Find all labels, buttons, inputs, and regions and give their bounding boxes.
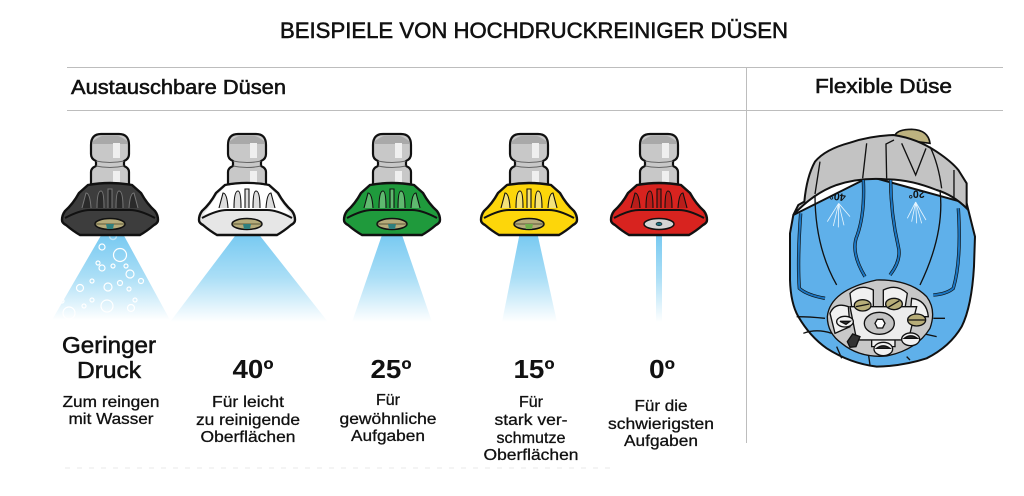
face (827, 280, 933, 356)
spray: 0 degrees (656, 232, 662, 322)
text: 40 degree use: Oberflächen (200, 429, 296, 446)
text: 15 degree use: schmutze (496, 430, 566, 447)
label: 40 degrees: 40º (232, 354, 274, 384)
text: 0 degree use: schwierigsten (608, 416, 714, 433)
text: 40 degree use: zu reinigende (196, 412, 300, 429)
nozzle: green (344, 134, 440, 235)
text: 15 degree use: Für (519, 394, 544, 411)
text: 40 degree use: Für leicht (212, 394, 285, 411)
spray: 25 degrees (352, 232, 432, 322)
label 40: 40° (829, 189, 847, 203)
text: 25 degree use: Aufgaben (351, 428, 425, 445)
label: Geringer Druck (62, 332, 156, 383)
text: 15 degree use: Oberflächen (484, 447, 578, 464)
text: low pressure use (62, 394, 160, 428)
body blue (790, 177, 975, 367)
text: 15 degree use: stark ver- (494, 412, 568, 429)
cap grey (793, 135, 967, 215)
label: 0 degrees: 0º (649, 354, 676, 384)
spray: 40 degrees (170, 232, 328, 322)
spray: 15 degrees (502, 232, 557, 322)
label: Geringer Druck: Geringer (62, 332, 156, 358)
heading: Austauschbare Düsen: Austauschbare Düsen (71, 77, 286, 99)
knob (895, 129, 930, 143)
grooves (855, 180, 865, 277)
label: Geringer Druck: Druck (77, 357, 142, 383)
text: 0 degree use: Aufgaben (624, 433, 698, 450)
nozzle: black (62, 134, 158, 235)
label: 25 degrees: 25º (370, 354, 412, 384)
text: 15 degree use (484, 394, 578, 464)
text: low pressure use: Zum reingen (62, 394, 160, 411)
nozzle: red (611, 134, 707, 235)
flexible nozzle (790, 129, 975, 367)
text: 25 degree use (340, 392, 437, 445)
text: 40 degree use (196, 394, 300, 446)
text: 25 degree use: gewöhnliche (340, 411, 437, 428)
heading: Flexible Düse: Flexible Düse (815, 76, 952, 98)
nozzle: white (199, 134, 295, 235)
title: BEISPIELE VON HOCHDRUCKREINIGER DÜSEN (280, 18, 788, 43)
label 20: 20° (909, 187, 925, 199)
text: 25 degree use: Für (376, 392, 401, 409)
text: 0 degree use (608, 398, 714, 450)
nozzle: yellow (481, 134, 577, 235)
spray: low pressure with bubbles (52, 232, 170, 320)
text: low pressure use: mit Wasser (68, 411, 154, 428)
spray marks (827, 202, 926, 227)
text: 0 degree use: Für die (634, 398, 688, 415)
label: 15 degrees: 15º (514, 354, 555, 384)
